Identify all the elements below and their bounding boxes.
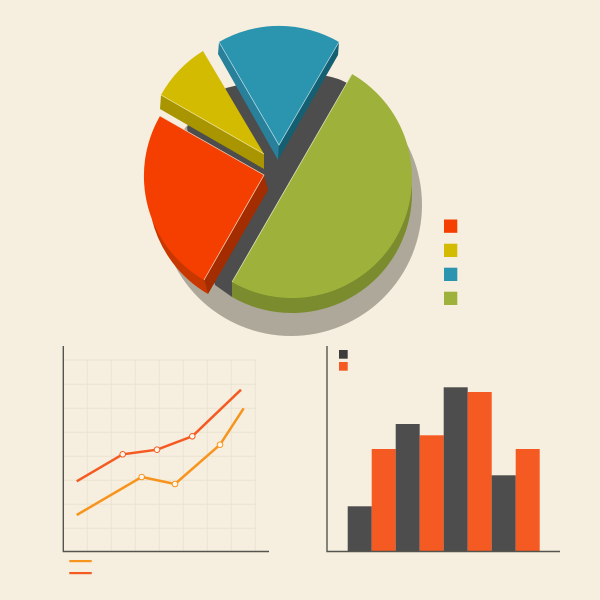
- slice: red: [144, 116, 268, 294]
- chart grid: [64, 360, 256, 551]
- red data line: [77, 390, 241, 481]
- 3D exploded pie chart: [144, 26, 422, 336]
- slice: yellow: [160, 51, 264, 169]
- line legend: orange: [69, 560, 92, 562]
- legend swatch: blue: [444, 268, 457, 281]
- legend swatch: red: [444, 220, 457, 233]
- pie drop shadow: [160, 74, 422, 336]
- legend swatch: yellow: [444, 244, 457, 257]
- slice: blue: [218, 26, 339, 160]
- bars: [348, 387, 540, 552]
- bar legend: dark: [339, 350, 348, 359]
- line legend: red: [69, 572, 92, 574]
- dark pie base: [187, 70, 347, 297]
- bar chart: [327, 346, 560, 552]
- legend swatch: green: [444, 292, 457, 305]
- bar legend: orange: [339, 362, 348, 371]
- bar chart axes: [327, 346, 560, 552]
- line chart: [63, 346, 269, 574]
- slice: green: [232, 74, 412, 313]
- chart axes: [63, 346, 269, 552]
- orange data line: [77, 408, 244, 515]
- pie legend: [444, 220, 457, 305]
